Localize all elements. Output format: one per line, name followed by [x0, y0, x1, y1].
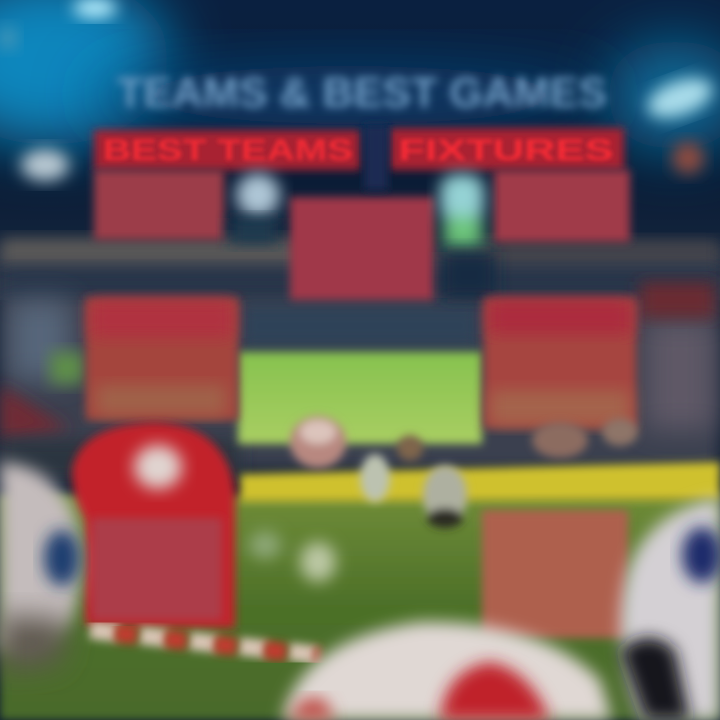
panel: red jersey card	[72, 422, 235, 628]
icon: team badge green	[440, 174, 484, 248]
icon: floodlight top left	[0, 26, 18, 50]
icon: ball right	[620, 498, 720, 720]
icon: team badge dark base	[230, 218, 278, 244]
yellow banner	[240, 462, 720, 502]
panel: header banner right: FIXTURES	[398, 134, 614, 167]
panel: card middle right	[484, 298, 636, 428]
panel: connector blue column	[364, 125, 388, 190]
panel: header banner right	[390, 128, 624, 170]
icon: team badge white	[236, 173, 280, 217]
icon: ball bottom	[282, 622, 612, 720]
icon: red light right	[672, 142, 704, 174]
panel: card lower right	[482, 510, 628, 638]
stadium stands	[0, 238, 720, 480]
icon: floodlight left	[21, 149, 69, 181]
panel: card top right	[494, 170, 630, 242]
background: night sky	[0, 0, 720, 300]
pitch left sliver	[50, 352, 84, 384]
icon: white marks on grass	[249, 531, 336, 582]
title: TEAMS & BEST GAMES	[117, 69, 607, 117]
pennant strip red	[115, 633, 320, 656]
panel: card top left	[94, 170, 224, 240]
panel: header banner left: BEST TEAMS	[103, 134, 353, 167]
panel: header banner left	[94, 130, 360, 170]
icon: dark player block	[442, 252, 496, 298]
panel: card top centre	[290, 197, 434, 300]
panel: card middle left	[86, 298, 238, 420]
icon: small balls on pitch	[290, 416, 638, 528]
pennant strip	[90, 630, 320, 655]
icon: ball left	[0, 462, 81, 672]
icon: floodlight right	[642, 70, 718, 126]
icon: floodlight top	[73, 0, 117, 18]
pitch	[238, 352, 482, 444]
lower grass	[0, 495, 720, 720]
